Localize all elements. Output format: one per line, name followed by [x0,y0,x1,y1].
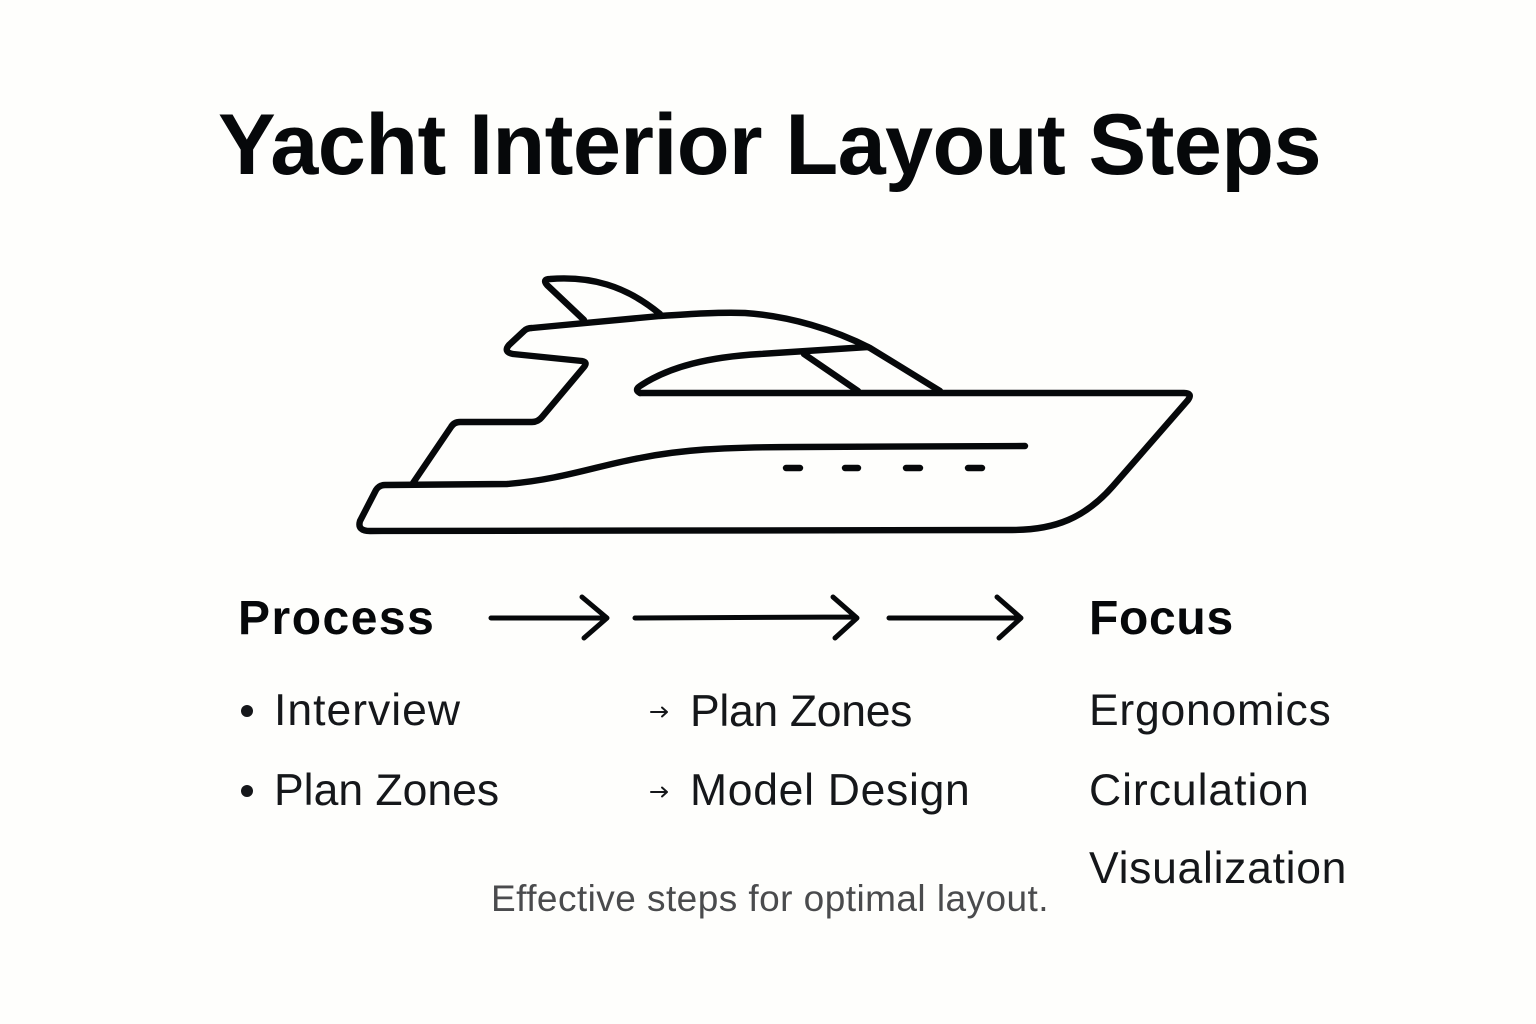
icon: yacht outline [356,275,1193,534]
icon: small arrow [650,706,668,718]
caption: Effective steps for optimal layout. [491,878,1049,919]
list item: plan zones: Plan Zones [274,766,499,815]
bullet list: process [241,686,499,815]
list item: circulation: Circulation [1089,766,1310,815]
list item: interview: Interview [274,686,461,735]
list: focus [1089,686,1347,893]
arrow list: middle [650,687,970,815]
list item: model design: Model Design [690,766,970,815]
list item: plan zones: Plan Zones [690,687,912,736]
heading: focus: Focus [1089,592,1234,645]
heading: process: Process [238,592,435,645]
list item: visualization: Visualization [1089,844,1347,893]
icon: small arrow [650,786,668,798]
list item: ergonomics: Ergonomics [1089,686,1331,735]
title: Yacht Interior Layout Steps [218,97,1321,193]
